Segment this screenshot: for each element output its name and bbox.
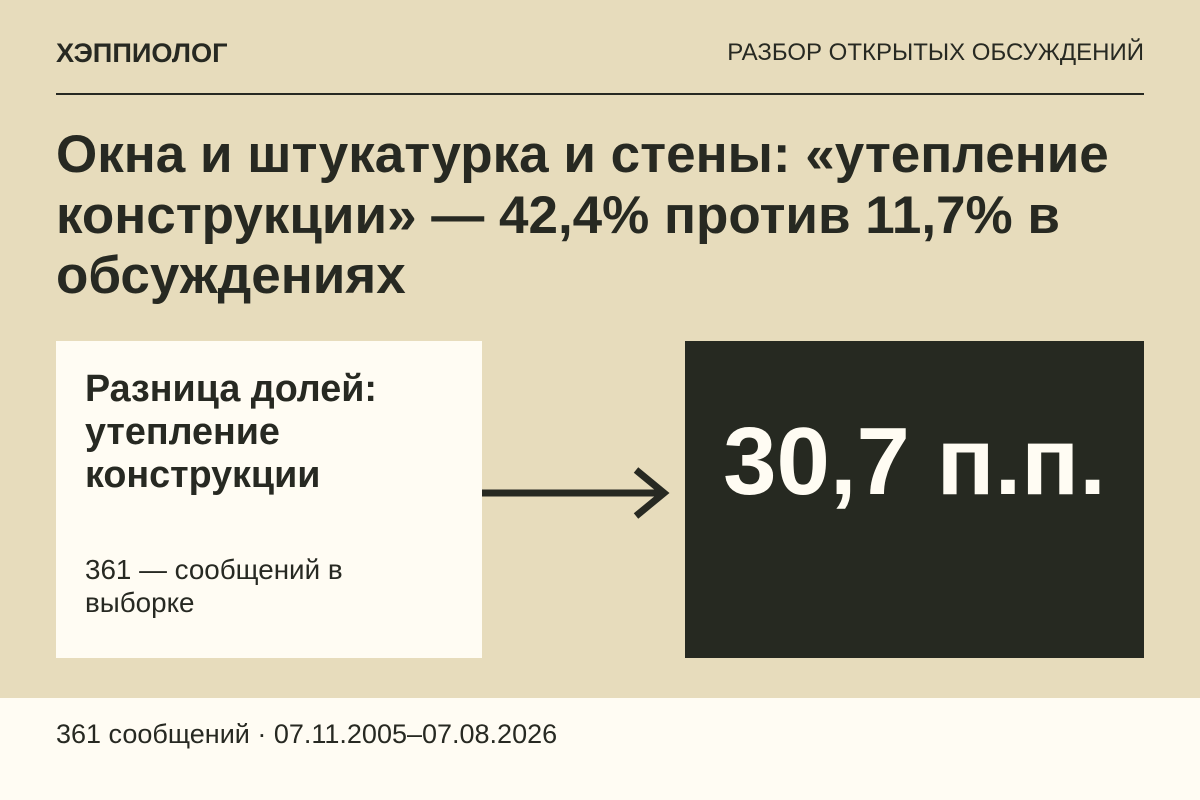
metric name: утепление	[85, 410, 280, 452]
footer text: 361 сообщений · 07.11.2005–07.08.2026	[56, 719, 557, 749]
title	[56, 125, 1109, 305]
title: конструкции» — 42,4% против 11,7% в	[56, 186, 1060, 244]
footer band	[0, 698, 1200, 800]
metric name: Разница долей:	[85, 367, 377, 409]
sample size note	[85, 554, 343, 618]
header subtitle: РАЗБОР ОТКРЫТЫХ ОБСУЖДЕНИЙ	[727, 39, 1144, 66]
panel: metric value	[685, 341, 1144, 658]
title: обсуждениях	[56, 246, 406, 305]
metric name	[85, 367, 377, 495]
panel: metric description	[56, 341, 482, 658]
sample size note: выборке	[85, 587, 195, 618]
title: Окна и штукатурка и стены: «утепление	[56, 125, 1109, 184]
header rule	[56, 93, 1144, 95]
arrow	[482, 467, 670, 519]
metric name: конструкции	[85, 453, 320, 495]
sample size note: 361 — сообщений в	[85, 554, 343, 585]
brand heading: ХЭППИОЛОГ	[56, 37, 228, 68]
big number: 30,7 п.п.	[723, 408, 1106, 515]
